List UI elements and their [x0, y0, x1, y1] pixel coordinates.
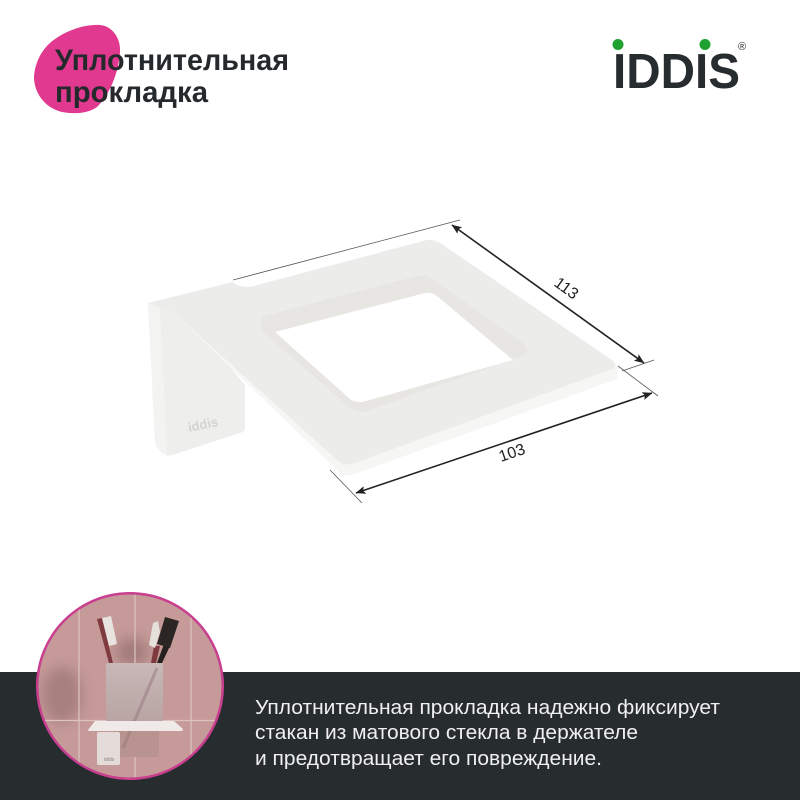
description text: Уплотнительная прокладка надежно фиксирует	[255, 697, 720, 719]
square opening	[275, 293, 513, 402]
description text: и предотвращает его повреждение.	[255, 748, 602, 770]
hole rim	[261, 275, 528, 412]
dimension 113	[233, 220, 658, 503]
tile shadows	[42, 667, 82, 723]
shelf	[88, 721, 183, 731]
title	[55, 44, 289, 109]
glass upper part	[106, 663, 163, 725]
description text	[255, 697, 720, 770]
photo: toothbrush holder	[36, 592, 224, 780]
label 103: 103	[497, 441, 528, 466]
description text: стакан из матового стекла в держателе	[255, 722, 638, 744]
wall mount	[148, 300, 245, 456]
dimension 103	[356, 393, 652, 493]
mount	[97, 732, 120, 765]
label 113: 113	[551, 274, 581, 303]
shelf plate	[148, 240, 618, 476]
logo green dots	[612, 39, 710, 50]
glass lower part	[113, 731, 159, 757]
product: holder with dimensions	[148, 220, 658, 503]
decorative pink blob	[34, 25, 120, 113]
title: прокладка	[55, 76, 209, 109]
registered mark: ®	[738, 41, 746, 53]
mount logo: iddis	[187, 414, 219, 435]
brushes	[97, 618, 113, 663]
dark footer band	[0, 672, 800, 800]
logo: IDDIS: IDDIS	[613, 45, 740, 99]
title: Уплотнительная	[55, 44, 289, 77]
photo: toothbrush holder: iddis	[104, 757, 115, 763]
